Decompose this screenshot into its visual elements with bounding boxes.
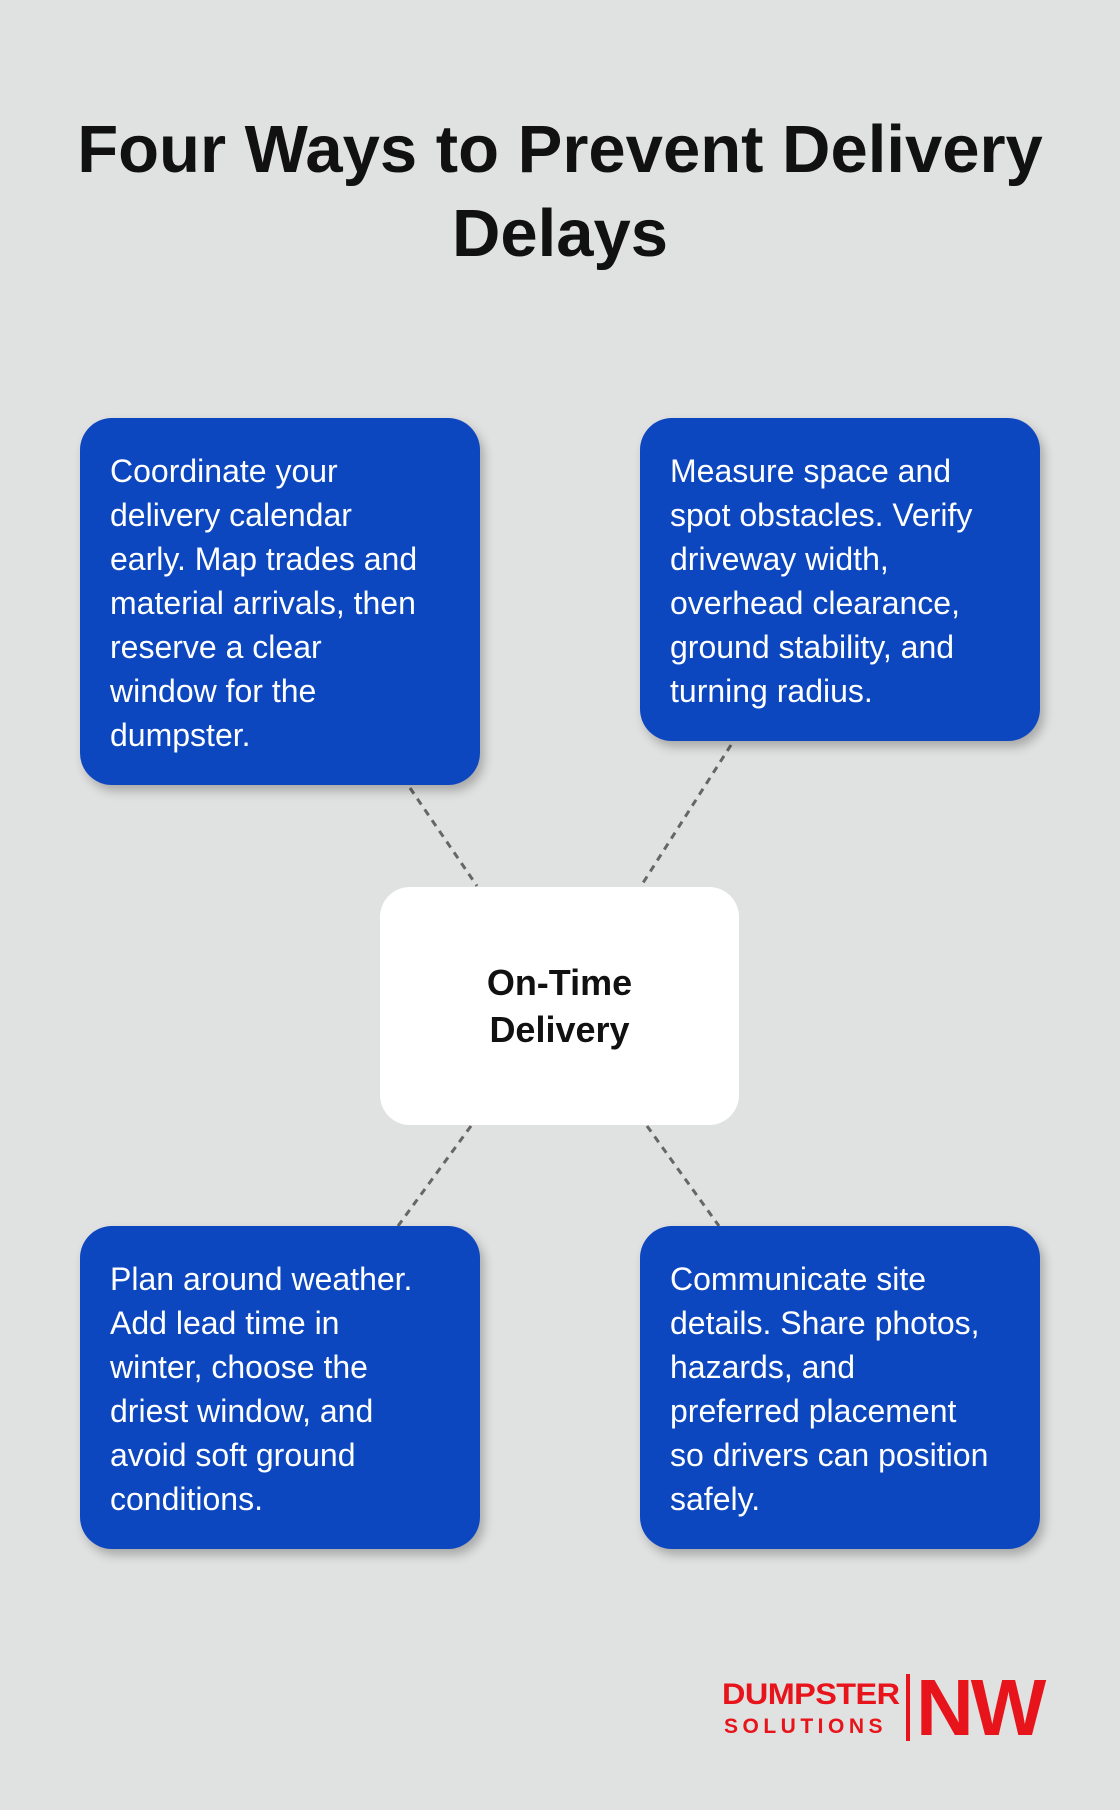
title: Four Ways to Prevent Delivery bbox=[77, 112, 1043, 187]
panel: measure space: spot obstacles. Verify bbox=[670, 497, 972, 533]
panel: communicate: so drivers can position bbox=[670, 1437, 988, 1473]
panel: coordinate calendar: window for the bbox=[110, 673, 316, 709]
panel: measure space bbox=[640, 418, 1040, 741]
panel: coordinate calendar: delivery calendar bbox=[110, 497, 352, 533]
panel: measure space: overhead clearance, bbox=[670, 585, 960, 621]
panel: coordinate calendar: reserve a clear bbox=[110, 629, 322, 665]
panel: communicate: hazards, and bbox=[670, 1349, 855, 1385]
logo: SOLUTIONS bbox=[724, 1715, 887, 1738]
panel: coordinate calendar: Coordinate your bbox=[110, 453, 338, 489]
panel: coordinate calendar: dumpster. bbox=[110, 717, 251, 753]
panel: weather: avoid soft ground bbox=[110, 1437, 356, 1473]
panel: measure space: ground stability, and bbox=[670, 629, 954, 665]
panel: communicate: Communicate site bbox=[670, 1261, 926, 1297]
center box bbox=[380, 887, 739, 1125]
panel: coordinate calendar: material arrivals, then bbox=[110, 585, 416, 621]
panel: communicate: preferred placement bbox=[670, 1393, 956, 1429]
panel: coordinate calendar bbox=[80, 418, 480, 785]
logo: DUMPSTER bbox=[722, 1678, 899, 1711]
logo: NW bbox=[916, 1663, 1043, 1752]
panel: measure space: driveway width, bbox=[670, 541, 889, 577]
panel: weather: driest window, and bbox=[110, 1393, 373, 1429]
panel: weather: winter, choose the bbox=[110, 1349, 368, 1385]
title bbox=[77, 112, 1043, 271]
panel: weather bbox=[80, 1226, 480, 1549]
panel: communicate: details. Share photos, bbox=[670, 1305, 980, 1341]
logo bbox=[722, 1663, 1046, 1752]
panel: weather: conditions. bbox=[110, 1481, 263, 1517]
panel: coordinate calendar: early. Map trades and bbox=[110, 541, 417, 577]
center box: On-Time bbox=[487, 962, 632, 1003]
panel: weather: Plan around weather. bbox=[110, 1261, 412, 1297]
center box: Delivery bbox=[489, 1009, 630, 1050]
panel: weather: Add lead time in bbox=[110, 1305, 339, 1341]
panel: measure space: Measure space and bbox=[670, 453, 951, 489]
panel: measure space: turning radius. bbox=[670, 673, 873, 709]
panel: communicate bbox=[640, 1226, 1040, 1549]
panel: communicate: safely. bbox=[670, 1481, 760, 1517]
title: Delays bbox=[452, 196, 668, 271]
